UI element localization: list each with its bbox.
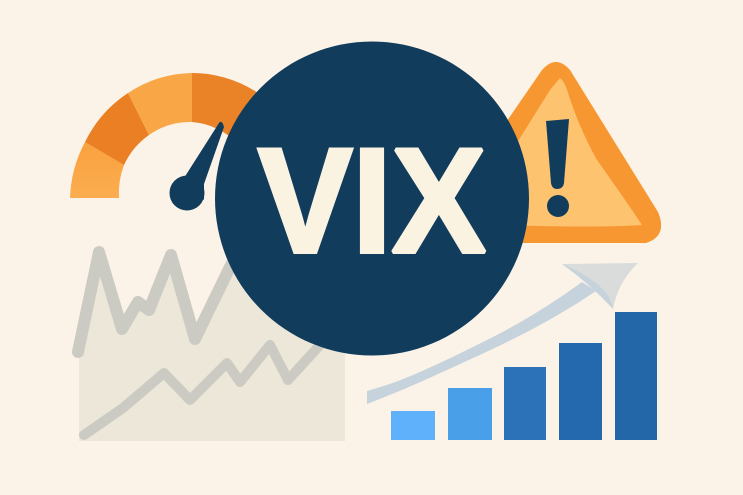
triangle border (480, 62, 661, 243)
warning triangle (480, 62, 661, 243)
bar 3 (504, 367, 546, 440)
gauge (70, 73, 300, 210)
bar 5 (615, 312, 657, 440)
gauge segment 3 (128, 73, 192, 135)
arrow shaft (367, 282, 596, 404)
gauge segment 2 (85, 93, 149, 165)
triangle inner fill (500, 78, 642, 226)
exclamation bar (546, 119, 569, 189)
arrow head right part (562, 263, 638, 309)
arrow head left part (562, 264, 613, 309)
line chart (78, 230, 345, 441)
exclamation mark (546, 119, 569, 217)
lower line (84, 345, 320, 435)
needle pointer (184, 122, 224, 200)
needle hub (170, 176, 204, 210)
bar 2 (448, 388, 492, 440)
gauge segment 4 (192, 73, 300, 150)
central circle with title (215, 42, 529, 356)
rising arrow (367, 263, 638, 404)
gauge segment 1 (70, 142, 124, 198)
upper line (78, 230, 250, 352)
title: VIX (258, 117, 486, 284)
gauge needle (170, 122, 224, 210)
bar 4 (559, 343, 602, 440)
bar chart (391, 312, 657, 440)
chart area (79, 230, 345, 441)
circle (215, 42, 529, 356)
exclamation dot (547, 195, 569, 217)
bar 1 (391, 411, 435, 440)
